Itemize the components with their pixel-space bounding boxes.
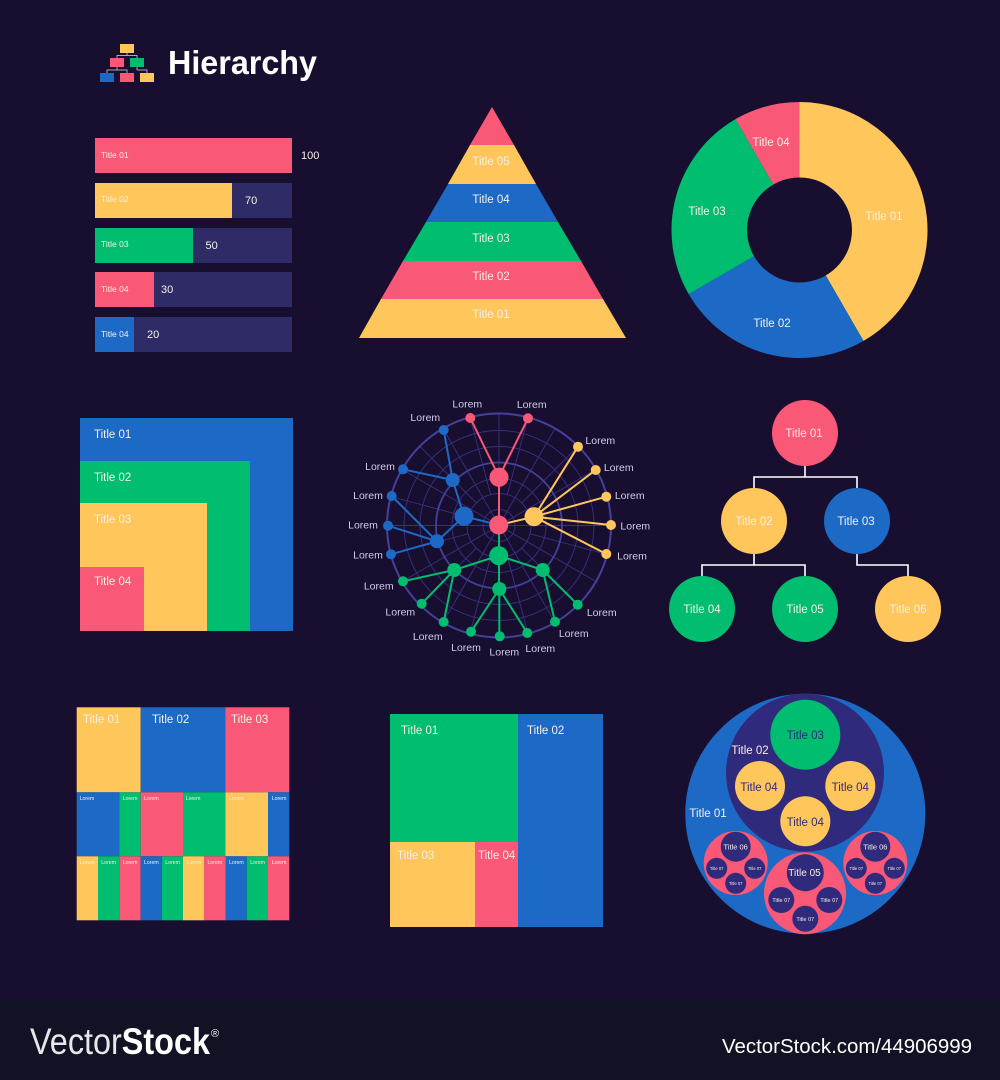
radial labels: Lorem xyxy=(620,520,650,532)
node 04 xyxy=(669,576,735,642)
radial labels: Lorem xyxy=(451,642,481,654)
panel: icicle treemap: Lorem xyxy=(250,860,265,866)
panel: donut chart: Title 01 xyxy=(865,211,903,223)
panel: icicle treemap: Title 01 xyxy=(83,714,120,726)
node 06: Title 06 xyxy=(889,604,927,616)
bar 05: 20 xyxy=(147,329,159,341)
radial labels: Lorem xyxy=(489,646,519,658)
panel: circle packing chart: Title 02 xyxy=(731,745,769,757)
center node xyxy=(489,516,508,534)
bar 03 xyxy=(95,228,292,263)
radial labels: Lorem xyxy=(604,462,634,474)
panel: icicle treemap: Lorem xyxy=(272,860,286,866)
cluster: title 05: Title 05 xyxy=(788,868,821,879)
bar 05: Title 04 xyxy=(101,329,129,339)
node 03: Title 03 xyxy=(837,516,875,528)
radial labels: Lorem xyxy=(452,398,482,410)
node 02 xyxy=(721,488,787,554)
cluster: left title 06: Title 07 xyxy=(748,866,762,871)
node 06 xyxy=(875,576,941,642)
bar 01: 100 xyxy=(301,150,319,162)
cluster: title 05: Title 07 xyxy=(820,898,838,904)
radial labels: Lorem xyxy=(617,550,647,562)
radial labels: Lorem xyxy=(615,490,645,502)
radial labels: Lorem xyxy=(353,490,383,502)
radial labels: Lorem xyxy=(585,435,615,447)
panel: nested squares: Title 03 xyxy=(94,514,131,526)
header: icon and title xyxy=(100,44,318,82)
radar grid xyxy=(387,414,611,638)
panel: nested squares: Title 04 xyxy=(94,576,132,588)
panel: donut chart: Title 03 xyxy=(688,206,726,218)
green branch xyxy=(398,525,583,641)
bar 04 xyxy=(95,272,292,307)
radial labels: Lorem xyxy=(410,412,440,424)
blue branch xyxy=(383,425,499,559)
panel: pyramid chart: Title 05 xyxy=(472,156,510,168)
node 05 xyxy=(772,576,838,642)
circles: title 04 xyxy=(735,761,875,846)
cluster: left title 06: Title 07 xyxy=(729,881,743,886)
cluster: right title 06: Title 07 xyxy=(869,881,883,886)
radial labels: Lorem xyxy=(587,607,617,619)
radial labels: Lorem xyxy=(525,643,555,655)
bar 03: Title 03 xyxy=(101,239,129,249)
radial labels: Lorem xyxy=(348,520,378,532)
bar 02: Title 02 xyxy=(101,194,129,204)
panel: nested squares: Title 01 xyxy=(94,429,131,441)
radial labels: Lorem xyxy=(413,631,443,643)
bar 05 xyxy=(95,317,292,352)
footer: watermark bar xyxy=(0,999,1000,1080)
panel: donut chart: Title 02 xyxy=(753,318,791,330)
cluster: title 05: Title 07 xyxy=(796,917,814,923)
icon: hierarchy org chart xyxy=(100,44,154,82)
panel: square treemap: Title 03 xyxy=(397,850,434,862)
panel: pyramid chart: Title 02 xyxy=(472,271,510,283)
panel: icicle treemap: Lorem xyxy=(144,860,159,866)
panel: icicle treemap: Lorem xyxy=(144,796,159,802)
panel: pyramid chart: Title 03 xyxy=(472,233,510,245)
panel: icicle treemap: Lorem xyxy=(101,860,116,866)
panel: pyramid chart xyxy=(359,107,626,338)
panel: square treemap xyxy=(390,714,603,927)
cluster: left title 06 xyxy=(704,831,768,895)
panel: nested squares xyxy=(80,418,293,631)
panel: donut chart: Title 04 xyxy=(752,137,790,149)
panel: icicle treemap: Lorem xyxy=(80,860,95,866)
panel: icicle treemap: Lorem xyxy=(208,860,222,866)
panel: org tree diagram xyxy=(669,400,941,642)
panel: icicle treemap: Lorem xyxy=(123,796,137,802)
circles: title 04: Title 04 xyxy=(787,817,825,829)
panel: icicle treemap: Lorem xyxy=(186,860,201,866)
circles: title 04: Title 04 xyxy=(740,782,778,794)
radial labels: Lorem xyxy=(517,399,547,411)
cluster: left title 06: Title 07 xyxy=(710,866,724,871)
pink branch xyxy=(465,413,533,525)
node 05: Title 05 xyxy=(786,604,824,616)
panel: icicle treemap: Lorem xyxy=(229,860,244,866)
cluster: right title 06: Title 07 xyxy=(888,866,902,871)
panel: pyramid chart: Title 01 xyxy=(472,309,510,321)
panel: icicle treemap: Lorem xyxy=(186,796,200,802)
cluster: right title 06: Title 07 xyxy=(850,866,864,871)
panel: icicle treemap: Lorem xyxy=(123,860,137,866)
bar 02 xyxy=(95,183,292,218)
bar 03: 50 xyxy=(206,240,218,252)
panel: circle packing chart xyxy=(685,694,925,934)
logo: VectorStock xyxy=(30,1021,210,1062)
radial labels xyxy=(348,398,650,658)
panel: icicle treemap: Title 02 xyxy=(152,714,189,726)
bar 01: Title 01 xyxy=(101,150,129,160)
bar 04: 30 xyxy=(161,284,173,296)
cluster: left title 06: Title 06 xyxy=(724,842,748,852)
node 03 xyxy=(824,488,890,554)
panel: donut chart xyxy=(672,102,927,358)
image id: VectorStock.com/44906999 xyxy=(722,1036,972,1058)
panel: icicle treemap: Title 03 xyxy=(231,714,268,726)
panel: icicle treemap: Lorem xyxy=(165,860,180,866)
circles: title 04: Title 04 xyxy=(832,782,870,794)
panel: pyramid chart: Title 04 xyxy=(472,194,510,206)
bar 01 xyxy=(95,138,319,173)
panel: square treemap: Title 02 xyxy=(527,725,564,737)
cluster: title 05 xyxy=(764,852,846,934)
radial labels: Lorem xyxy=(365,461,395,473)
cluster: right title 06: Title 06 xyxy=(863,842,887,852)
registered mark: ® xyxy=(211,1028,219,1040)
connectors xyxy=(702,466,908,576)
panel: horizontal bar chart xyxy=(95,138,319,352)
circle: title 03 xyxy=(770,700,840,770)
yellow branch xyxy=(499,442,616,559)
node 01 xyxy=(772,400,838,466)
node 04: Title 04 xyxy=(683,604,721,616)
radial labels: Lorem xyxy=(385,606,415,618)
panel: icicle treemap xyxy=(77,707,289,920)
cluster: right title 06 xyxy=(843,831,907,895)
circle: title 03: Title 03 xyxy=(787,730,824,742)
panel: square treemap: Title 01 xyxy=(401,725,438,737)
panel: icicle treemap: Lorem xyxy=(272,796,286,802)
node 02: Title 02 xyxy=(735,516,773,528)
panel: icicle treemap: Lorem xyxy=(80,796,94,802)
node 01: Title 01 xyxy=(785,428,823,440)
panel: nested squares: Title 02 xyxy=(94,472,131,484)
panel: radial tree chart xyxy=(348,398,650,658)
cluster: title 05: Title 07 xyxy=(772,898,790,904)
radial labels: Lorem xyxy=(353,550,383,562)
radial labels: Lorem xyxy=(559,628,589,640)
title: Hierarchy xyxy=(168,44,318,81)
bar 04: Title 04 xyxy=(101,284,129,294)
panel: square treemap: Title 04 xyxy=(478,850,516,862)
bar 02: 70 xyxy=(245,195,257,207)
panel: icicle treemap: Lorem xyxy=(229,796,244,802)
panel: circle packing chart: Title 01 xyxy=(689,808,727,820)
radial labels: Lorem xyxy=(364,580,394,592)
